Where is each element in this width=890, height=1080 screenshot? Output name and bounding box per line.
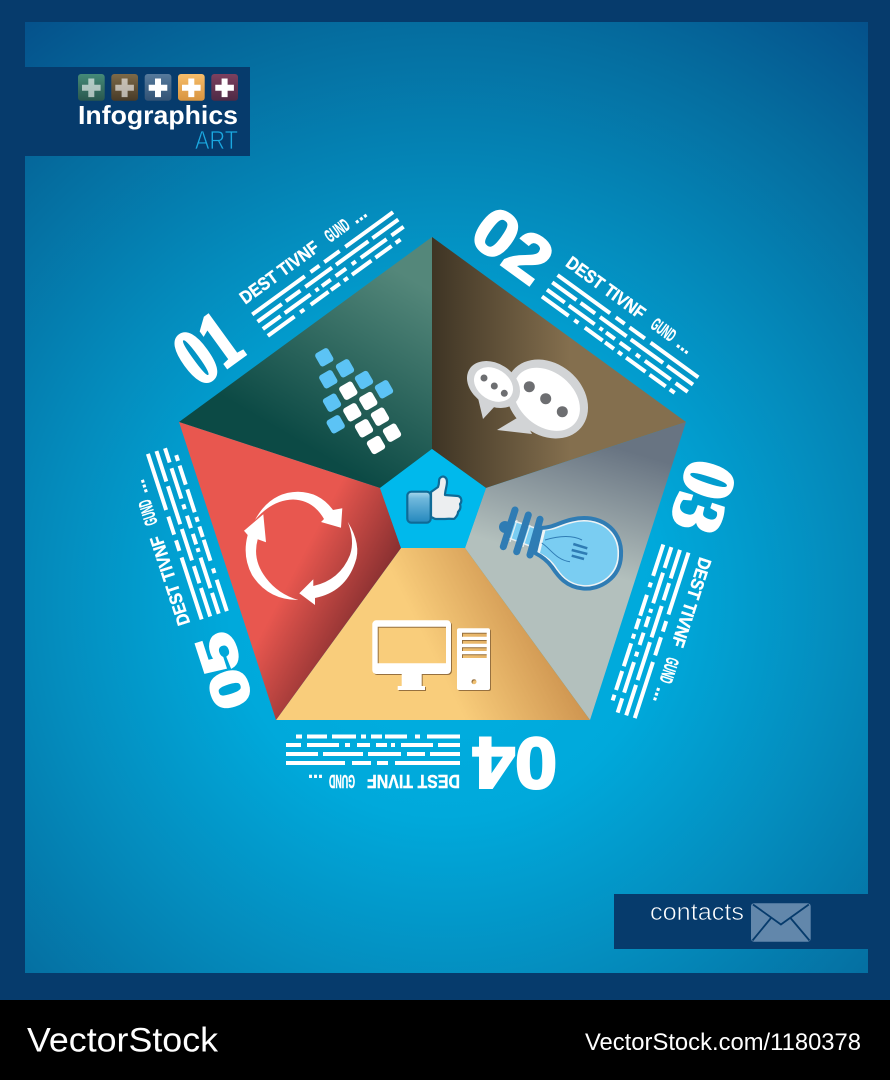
label [308, 771, 460, 791]
label: ... [347, 202, 371, 227]
panel 1: green [179, 237, 432, 488]
number 03: 03 [654, 451, 752, 543]
icon: speech bubbles [458, 343, 604, 455]
icon: orange plus [178, 74, 205, 101]
icon: arrow of dots [314, 347, 402, 455]
panel 3: grey [465, 422, 686, 720]
label [128, 477, 194, 628]
label: GUND [647, 314, 680, 346]
text bars [610, 544, 689, 718]
footer band [0, 1000, 890, 1080]
header badge [25, 67, 250, 156]
label: ... [649, 685, 673, 706]
label: GUND [329, 771, 355, 791]
text bars [252, 212, 409, 336]
label: ... [673, 333, 697, 358]
icon: brown plus [111, 74, 138, 101]
icon: slate plus [145, 74, 171, 101]
contacts bar [614, 894, 890, 949]
label: ... [128, 477, 152, 498]
text block 03 [594, 451, 752, 730]
text block 02 [459, 192, 719, 409]
text block 05 [121, 443, 264, 717]
label: DEST TIVNF [367, 771, 460, 791]
text block 04 [286, 722, 557, 802]
number 01: 01 [158, 296, 258, 402]
number 05: 05 [185, 626, 264, 716]
label: DEST TIVNF [562, 252, 649, 323]
panel 4: orange [276, 548, 590, 720]
label: GUND [656, 655, 683, 686]
label: GUND [321, 215, 354, 246]
panel 5: red [179, 422, 401, 720]
footer brand: VectorStock [27, 1022, 219, 1060]
centre pentagon [380, 449, 486, 548]
label [649, 555, 715, 706]
contacts label: contacts [650, 899, 744, 926]
panel 2: brown [432, 237, 686, 488]
heading: ART: ART [195, 125, 238, 155]
text block 01 [158, 178, 420, 402]
label [236, 202, 371, 308]
text bars [148, 446, 227, 619]
label: GUND [135, 497, 162, 528]
icon: desktop computer [372, 620, 490, 690]
icon: light bulb [499, 510, 621, 589]
icon: plum plus [211, 74, 238, 101]
icon: recycle arrows [244, 492, 357, 605]
label: DEST TIVNF [236, 237, 323, 308]
text bars [542, 275, 698, 399]
label: DEST TIVNF [146, 533, 194, 628]
label [562, 252, 697, 358]
heading: Infographics: Infographics [78, 100, 238, 130]
icon: envelope [751, 903, 811, 942]
number 02: 02 [459, 192, 567, 298]
label: DEST TIVNF [667, 555, 715, 650]
icon: thumbs up [407, 477, 461, 523]
footer url: VectorStock.com/1180378 [585, 1029, 861, 1056]
label: ... [308, 771, 323, 791]
icon: green plus [78, 74, 105, 101]
text bars [286, 736, 460, 763]
number 04: 04 [473, 722, 557, 802]
